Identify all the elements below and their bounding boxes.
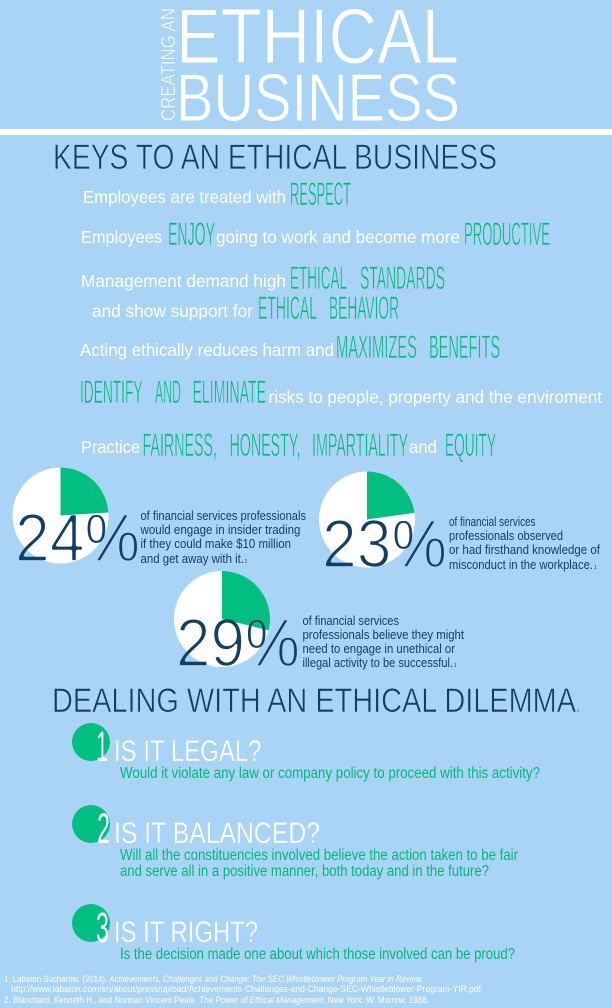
caption: of financial services professionals (140, 508, 306, 523)
key: maximizes benefits: MAXIMIZES (336, 329, 417, 365)
key: maximizes benefits: Acting ethically reduces harm and (80, 340, 334, 360)
heading: keys to an ethical business: KEYS TO AN ETHICAL BUSINESS (53, 138, 497, 177)
key: respect: Employees are treated with (83, 187, 286, 207)
stat: 24%: 24% (15, 500, 140, 576)
caption: 1 (454, 663, 457, 669)
key: identify and eliminate: AND (155, 374, 181, 410)
key: maximizes benefits (80, 329, 500, 365)
icon: number circle 2: 2 (97, 805, 110, 853)
caption (140, 508, 306, 566)
stat: 29%: 29% (176, 605, 300, 681)
caption: and get away with it. (140, 551, 244, 566)
pie chart: 23% (319, 472, 415, 568)
caption (302, 613, 464, 670)
step 1: is it legal (72, 723, 540, 782)
icon: number circle 3: 3 (96, 904, 109, 952)
key: fairness, honesty, impartiality and equity (81, 427, 496, 463)
pie chart: 29% (174, 571, 270, 667)
step 1: is it legal: IS IT LEGAL? (114, 735, 262, 768)
heading: dealing with an ethical dilemma: 2 (577, 708, 580, 713)
key: fairness, honesty, impartiality and equity: Practice (81, 437, 140, 457)
step 2: is it balanced: Will all the constituencies involved believe the action taken to be fair (120, 847, 518, 864)
caption: if they could make $10 million (140, 536, 291, 551)
key: enjoy and productive: Employees (81, 227, 162, 247)
step 1: is it legal: Would it violate any law or company policy to proceed with this activity? (120, 765, 540, 782)
step 2: is it balanced: and serve all in a positive manner, both today and in the future? (120, 863, 489, 880)
key: ethical standards and behavior: ETHICAL (258, 290, 317, 326)
caption: would engage in insider trading (140, 522, 300, 537)
caption: professionals believe they might (302, 627, 464, 642)
footnotes: 2. Blanchard, Kenneth H., and Norman Vincent Peale. The Power of Ethical Management. New York: W. Morrow, 1988. (4, 995, 429, 1005)
step 2: is it balanced: IS IT BALANCED? (114, 817, 320, 850)
caption: need to engage in unethical or (302, 641, 456, 656)
caption: 1 (594, 565, 597, 571)
caption (449, 514, 600, 572)
key: ethical standards and behavior: Management demand high (81, 271, 286, 291)
key: enjoy and productive (81, 216, 550, 252)
icon: number circle 2 (72, 805, 110, 853)
caption: illegal activity to be successful. (302, 655, 453, 670)
footnotes: http://www.labaton.com/en/about/press/upload/Achievements-Challenges-and-Change-SEC-Whistleblower-Program-YIR.pdf (11, 984, 481, 994)
key: enjoy and productive: ENJOY (168, 216, 215, 252)
stat: 24% (12, 467, 306, 576)
key: fairness, honesty, impartiality and equity: HONESTY, (230, 427, 300, 463)
key: respect (83, 176, 351, 212)
step 3: is it right: Is the decision made one about which those involved can be proud? (120, 946, 515, 963)
key: fairness, honesty, impartiality and equity: FAIRNESS, (142, 427, 217, 463)
caption: misconduct in the workplace. (449, 557, 593, 572)
footnotes (4, 974, 481, 1005)
caption: of financial services (302, 613, 399, 628)
panel: keys list: STANDARDS (360, 260, 445, 296)
panel: keys list: RESPECT (290, 176, 351, 212)
key: identify and eliminate: risks to people, property and the enviroment (268, 387, 602, 407)
title: BUSINESS (176, 60, 460, 136)
stat: 23%: 23% (322, 506, 447, 582)
pie chart: 24% (12, 467, 108, 564)
key: fairness, honesty, impartiality and equity: and (409, 437, 437, 457)
panel: keys list (80, 176, 602, 463)
caption: 1 (244, 559, 248, 565)
key: ethical standards and behavior: BEHAVIOR (329, 290, 399, 326)
key: ethical standards and behavior: and show support for (92, 301, 253, 321)
title (158, 0, 460, 136)
step 3: is it right: IS IT RIGHT? (114, 916, 258, 949)
footnotes: 1. Labaton Sucharow. (2014). Achievements, Challenges and Change: The SEC Whistleblower Program Year in Review. (4, 974, 424, 984)
icon: number circle 1 (72, 723, 110, 771)
stat: 29% (174, 571, 464, 681)
caption: of financial services (449, 514, 536, 529)
key: ethical standards and behavior (81, 260, 445, 326)
step 3: is it right (72, 904, 515, 963)
step 2: is it balanced (72, 805, 518, 880)
key: enjoy and productive: going to work and become more (216, 227, 460, 247)
icon: number circle 3 (72, 904, 110, 952)
key: identify and eliminate: IDENTIFY (80, 374, 142, 410)
panel: keys list: EQUITY (445, 427, 496, 463)
key: identify and eliminate: ELIMINATE (192, 374, 266, 410)
icon: number circle 1: 1 (96, 723, 108, 771)
stat: 23% (319, 472, 600, 582)
key: ethical standards and behavior: ETHICAL (290, 260, 347, 296)
panel: keys list: BENEFITS (429, 329, 500, 365)
key: fairness, honesty, impartiality and equity: IMPARTIALITY (312, 427, 408, 463)
key: identify and eliminate (80, 374, 602, 410)
caption: professionals observed (449, 528, 563, 543)
